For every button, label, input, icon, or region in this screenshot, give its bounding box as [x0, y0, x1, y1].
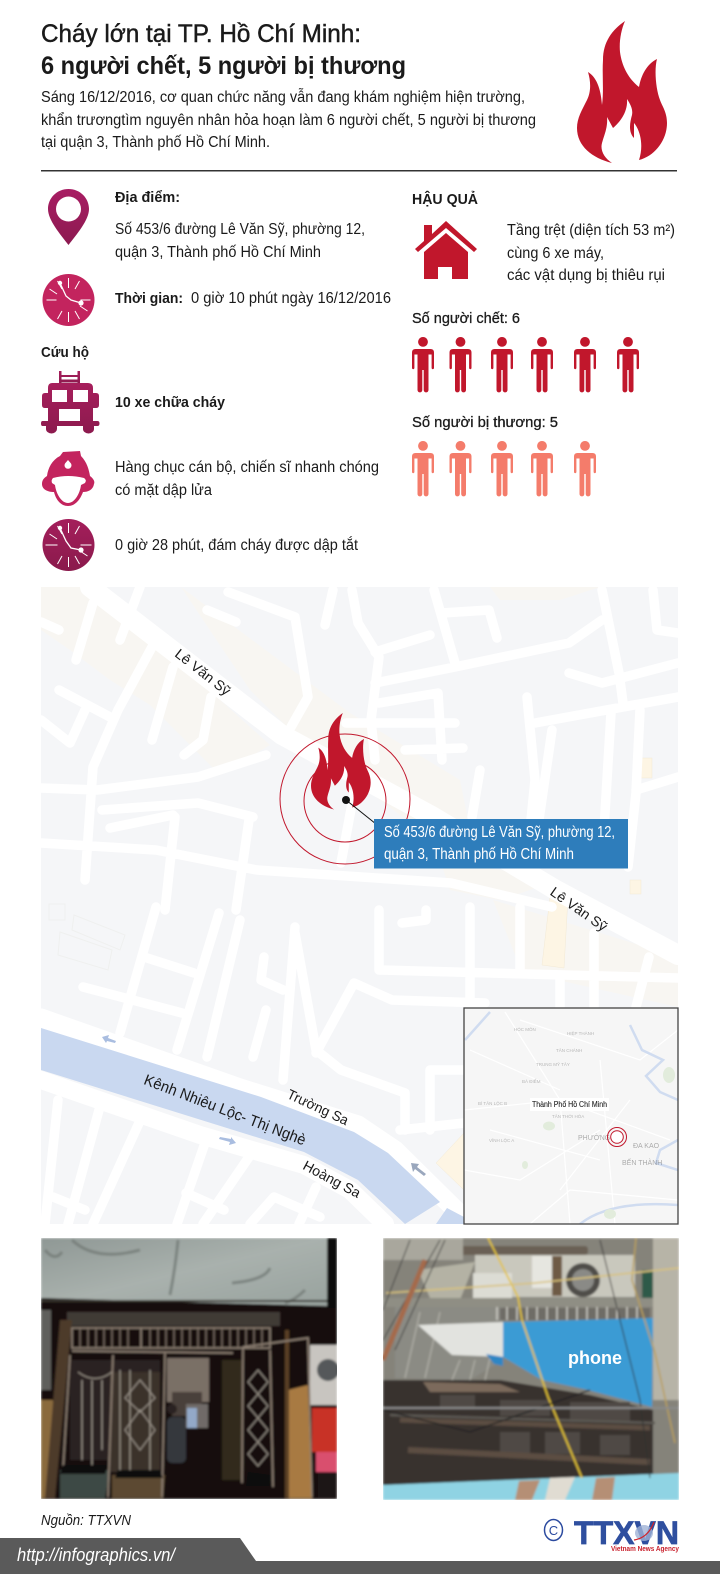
- photo: burnt house front: [41, 1238, 339, 1499]
- inset city map: BẾN THÀNH: [622, 1157, 662, 1167]
- title: [41, 20, 406, 80]
- address callout: [374, 819, 628, 868]
- inset city map: TÂN THỚI HÒA: [552, 1113, 584, 1119]
- inset city map: TRUNG MỸ TÂY: [536, 1061, 570, 1067]
- inset city map: ĐA KAO: [633, 1143, 660, 1150]
- rescue text: officers: có mặt dập lửa: [115, 482, 212, 499]
- street labels: Kênh Nhiêu Lộc- Thị Nghè: [141, 1072, 308, 1149]
- photo: damaged building with banner: phone: [568, 1348, 622, 1368]
- intro text: tại quận 3, Thành phố Hồ Chí Minh.: [41, 134, 270, 151]
- icon: location pin: [48, 189, 89, 245]
- location text: Số 453/6 đường Lê Văn Sỹ, phường 12,: [115, 221, 365, 238]
- intro text: [41, 89, 536, 151]
- consequences text: Tầng trệt (diện tích 53 m²): [507, 222, 675, 239]
- time text: [115, 290, 391, 307]
- heading: rescue: Cứu hộ: [41, 344, 89, 361]
- heading: deaths: Số người chết: 6: [412, 310, 520, 327]
- logo: TTXVN: Vietnam News Agency: [611, 1546, 679, 1553]
- street labels: Trường Sa: [285, 1086, 351, 1128]
- inset city map: Thành Phố Hồ Chí Minh: [532, 1100, 607, 1109]
- icon row: 6 dead: [412, 337, 639, 392]
- intro text: Sáng 16/12/2016, cơ quan chức năng vẫn đang khám nghiệm hiện trường,: [41, 89, 525, 106]
- icon: fire truck: [41, 371, 100, 434]
- inset city map: PHƯỜNG: [578, 1133, 610, 1142]
- footer bar: http://infographics.vn/: [17, 1545, 177, 1565]
- footer bar: [0, 1538, 720, 1574]
- time text: 0 giờ 10 phút ngày 16/12/2016: [191, 290, 391, 307]
- consequences text: [507, 222, 675, 284]
- heading: injured: Số người bị thương: 5: [412, 414, 558, 431]
- fire location marker: [280, 713, 410, 864]
- icon: big flame: [577, 21, 667, 163]
- time text: Thời gian:: [115, 290, 183, 307]
- address callout: quận 3, Thành phố Hồ Chí Minh: [384, 846, 574, 863]
- icon: firefighter helmet: [42, 451, 94, 506]
- icon row: 5 injured: [412, 441, 596, 496]
- street map: [41, 587, 678, 1224]
- rescue text: officers: Hàng chục cán bộ, chiến sĩ nhanh chóng: [115, 459, 379, 476]
- rescue text: extinguished: 0 giờ 28 phút, đám cháy được dập tắt: [115, 537, 359, 554]
- inset city map: VĨNH LỘC A: [489, 1137, 514, 1143]
- inset city map: [464, 1008, 678, 1224]
- title: Cháy lớn tại TP. Hồ Chí Minh:: [41, 20, 361, 48]
- source: Nguồn: TTXVN: [41, 1512, 131, 1529]
- heading: consequences: HẬU QUẢ: [412, 190, 478, 208]
- photo: damaged building with banner: [383, 1238, 679, 1500]
- icon: clock time: [42, 274, 94, 326]
- rescue text: trucks: 10 xe chữa cháy: [115, 394, 226, 411]
- street labels: [141, 645, 611, 1201]
- icon: clock extinguished: [42, 519, 94, 571]
- rescue text: officers: [115, 459, 379, 499]
- logo: TTXVN: C: [549, 1523, 558, 1538]
- canal: [41, 1028, 464, 1224]
- consequences text: cùng 6 xe máy,: [507, 245, 604, 262]
- consequences text: các vật dụng bị thiêu rụi: [507, 267, 665, 284]
- traffic arrows: [102, 1035, 426, 1176]
- address callout: Số 453/6 đường Lê Văn Sỹ, phường 12,: [384, 824, 615, 841]
- street labels: Hoàng Sa: [300, 1157, 364, 1201]
- inset city map: BÀ ĐIỂM: [522, 1078, 541, 1084]
- road network: [41, 587, 678, 1224]
- inset city map: HÓC MÔN: [514, 1026, 536, 1032]
- intro text: khẩn trươngtìm nguyên nhân hỏa hoạn làm 6 người chết, 5 người bị thương: [41, 112, 536, 129]
- inset city map: TÂN CHÁNH: [556, 1047, 582, 1053]
- inset city map: BÌ TÂN LỘC B: [478, 1100, 507, 1106]
- location text: [115, 189, 365, 261]
- location text: quận 3, Thành phố Hồ Chí Minh: [115, 244, 321, 261]
- logo: TTXVN: TTXVN: [574, 1515, 679, 1551]
- title: 6 người chết, 5 người bị thương: [41, 52, 406, 80]
- location text: Địa điểm:: [115, 189, 180, 206]
- icon: house: [415, 221, 477, 279]
- street labels: Lê Văn Sỹ: [172, 645, 234, 699]
- street labels: Lê Văn Sỹ: [547, 884, 611, 934]
- inset city map: HIỆP THÀNH: [567, 1029, 594, 1036]
